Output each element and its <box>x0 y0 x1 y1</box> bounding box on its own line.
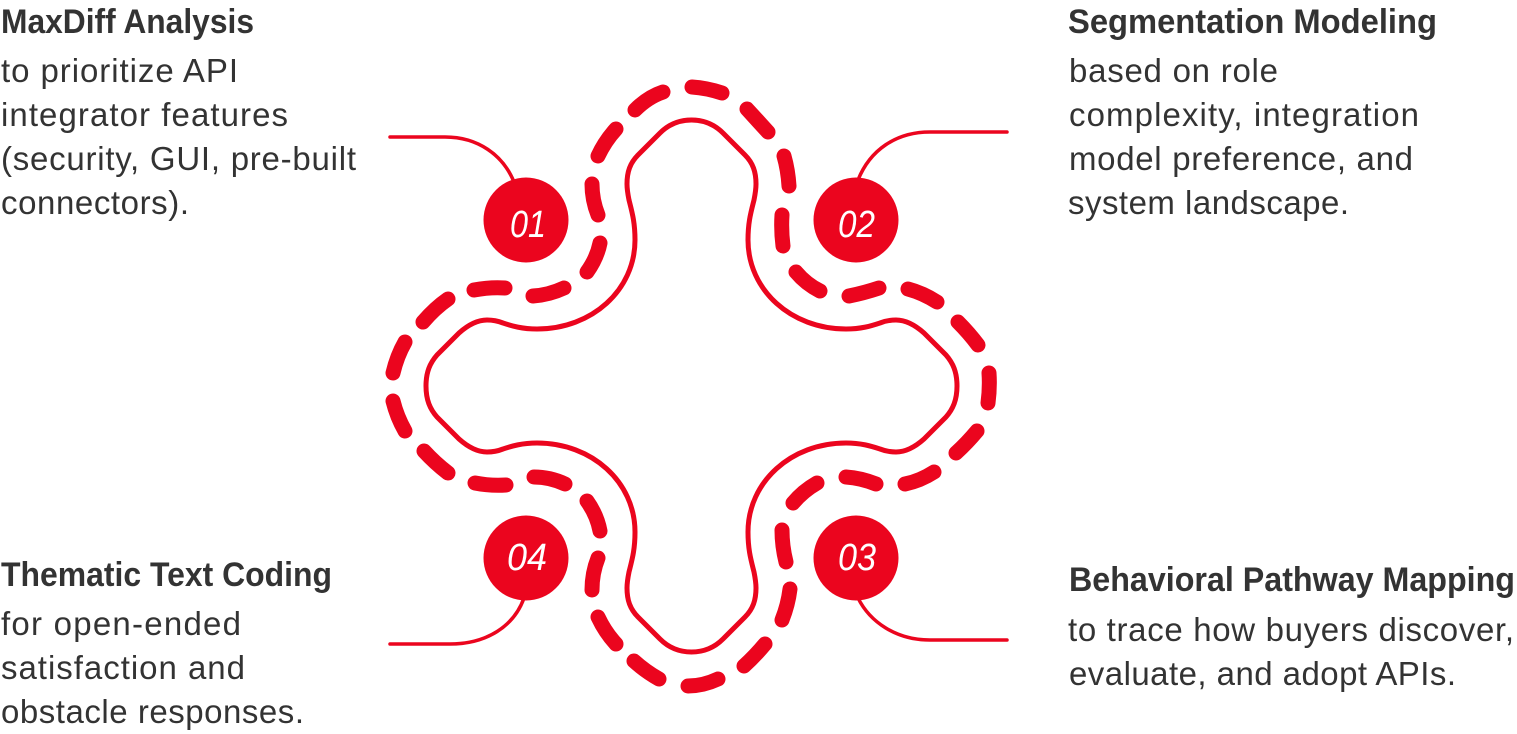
leader line 04 <box>390 598 524 644</box>
description: Thematic Text Coding: obstacle responses. <box>1 693 304 730</box>
description: Segmentation Modeling: based on role <box>1069 52 1278 89</box>
description: Behavioral Pathway Mapping <box>1068 611 1514 692</box>
description: Segmentation Modeling: system landscape. <box>1068 184 1349 221</box>
description: MaxDiff Analysis: integrator features <box>1 96 288 133</box>
leader line 03 <box>858 598 1007 640</box>
badge 04 <box>484 516 568 600</box>
leader line 01 <box>390 137 514 182</box>
badge 02 <box>814 178 898 262</box>
inner road outline <box>426 120 957 652</box>
leader line 02 <box>858 132 1007 180</box>
description: Behavioral Pathway Mapping: to trace how buyers discover, <box>1068 611 1514 648</box>
badge 02: 02 <box>838 204 875 246</box>
description: MaxDiff Analysis: connectors). <box>1 184 189 221</box>
badge 01 <box>484 178 568 262</box>
text block: Thematic Text Coding <box>1 556 332 730</box>
description: Segmentation Modeling: complexity, integration <box>1069 96 1419 133</box>
badge 03: 03 <box>838 537 876 579</box>
description: MaxDiff Analysis <box>1 52 356 221</box>
heading: MaxDiff Analysis: MaxDiff Analysis <box>1 3 254 41</box>
description: Segmentation Modeling <box>1068 52 1419 221</box>
badge 04: 04 <box>507 537 547 579</box>
heading: Thematic Text Coding: Thematic Text Coding <box>1 556 332 594</box>
description: Thematic Text Coding <box>1 605 304 730</box>
description: MaxDiff Analysis: to prioritize API <box>1 52 238 89</box>
heading: Segmentation Modeling: Segmentation Modeling <box>1068 3 1437 41</box>
text block: Segmentation Modeling <box>1068 3 1437 221</box>
text block: Behavioral Pathway Mapping <box>1068 561 1515 692</box>
outer dashed road line <box>393 87 989 686</box>
description: Thematic Text Coding: satisfaction and <box>1 649 245 686</box>
description: MaxDiff Analysis: (security, GUI, pre-built <box>1 140 356 177</box>
text block: MaxDiff Analysis <box>1 3 356 221</box>
badge 01: 01 <box>510 204 546 246</box>
description: Thematic Text Coding: for open-ended <box>1 605 241 642</box>
badge 03 <box>814 516 898 600</box>
description: Segmentation Modeling: model preference, and <box>1069 140 1413 177</box>
description: Behavioral Pathway Mapping: evaluate, and adopt APIs. <box>1069 655 1456 692</box>
